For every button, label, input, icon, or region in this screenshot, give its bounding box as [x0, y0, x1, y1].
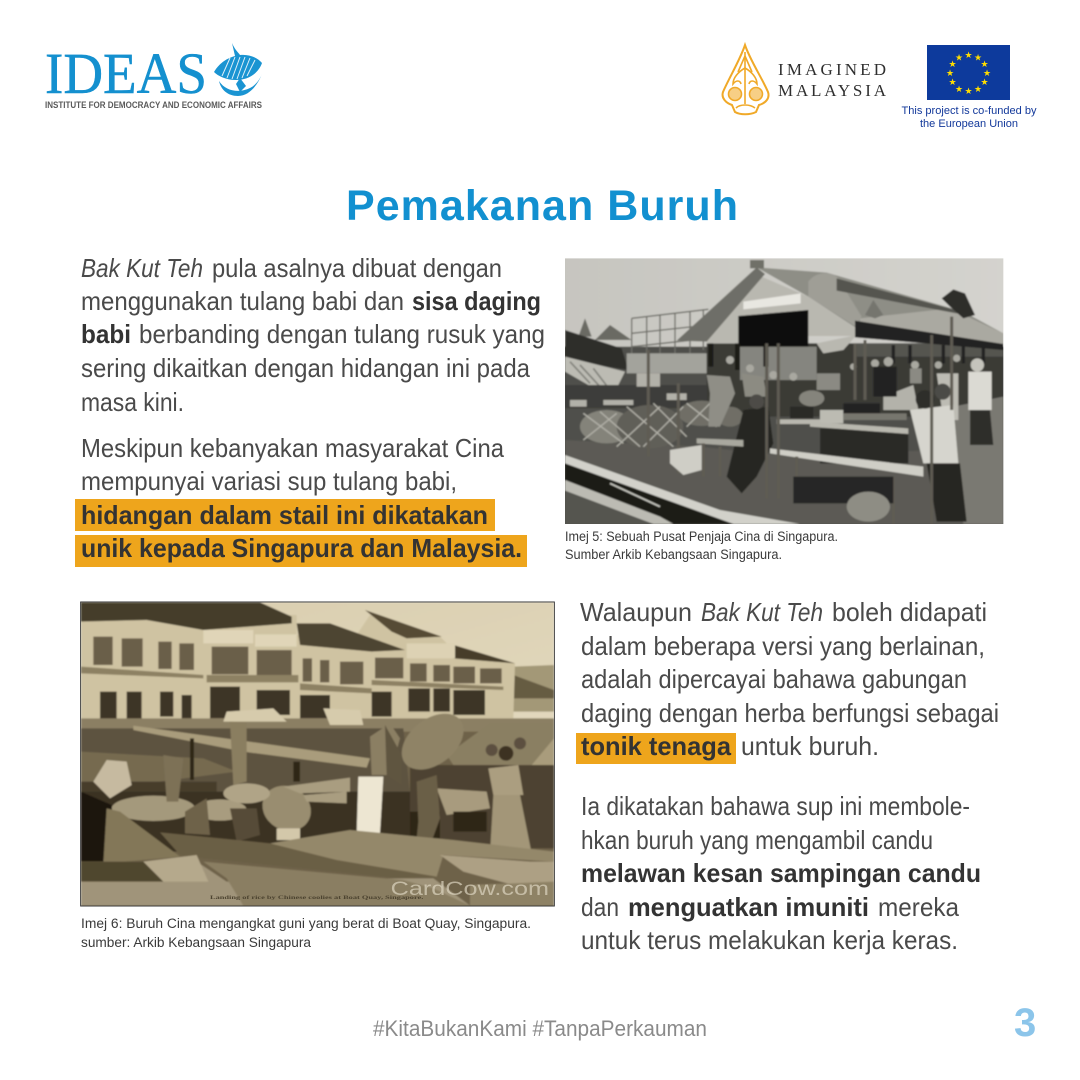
- boats mid: [81, 728, 410, 795]
- sacks: [112, 796, 195, 821]
- text block: first paragraph: menggunakan tulang babi dan: [81, 286, 404, 316]
- text block: third paragraph with highlight: Walaupun: [580, 597, 692, 627]
- text block: third paragraph with highlight: boleh didapati: [832, 597, 987, 627]
- text block: third paragraph with highlight: [576, 597, 999, 764]
- IDEAS wordmark: IDEAS: [45, 41, 207, 106]
- text block: third paragraph with highlight: untuk buruh.: [741, 731, 879, 761]
- shophouses wall: [81, 615, 515, 718]
- text block: second paragraph with highlight: Meskipun kebanyakan masyarakat Cina: [81, 433, 504, 463]
- text block: third paragraph with highlight: daging dengan herba berfungsi sebagai: [581, 698, 999, 728]
- distant buildings: [513, 665, 554, 712]
- icon: EU flag: ★: [980, 77, 989, 87]
- right canopy: [448, 732, 554, 766]
- text block: first paragraph: [81, 253, 545, 417]
- ground: [565, 440, 1003, 524]
- text block: first paragraph: masa kini.: [81, 387, 184, 417]
- people: [707, 375, 735, 427]
- IDEAS tagline: INSTITUTE FOR DEMOCRACY AND ECONOMIC AFFAIRS: [45, 100, 262, 110]
- quay band: [81, 718, 554, 732]
- footer hashtags: #KitaBukanKami #TanpaPerkauman: [373, 1016, 707, 1041]
- channel: [565, 455, 800, 524]
- icon: EU flag: ★: [946, 68, 954, 78]
- text block: third paragraph with highlight: dalam beberapa versi yang berlainan,: [581, 631, 985, 661]
- text block: first paragraph: pula asalnya dibuat dengan: [212, 253, 502, 283]
- baskets: [579, 409, 624, 444]
- icon: EU flag: ★: [955, 52, 963, 62]
- Imagined Malaysia wordmark: IMAGINED: [778, 60, 886, 79]
- text block: fourth paragraph: mereka: [878, 892, 959, 922]
- icon: EU flag: ★: [948, 59, 957, 69]
- highlight line 2: unik kepada Singapura dan Malaysia.: [81, 533, 522, 563]
- co-funding note: This project is co-funded by: [902, 105, 1037, 117]
- icon: EU flag: ★: [974, 84, 982, 94]
- caption: image 5: [565, 529, 838, 562]
- workers: [370, 723, 400, 775]
- logo: Imagined Malaysia: MALAYSIA: [778, 81, 887, 100]
- text block: fourth paragraph: Ia dikatakan bahawa sup ini membole-: [581, 791, 970, 821]
- icon: IDEAS bird: [214, 43, 262, 96]
- text block: fourth paragraph: melawan kesan sampingan candu: [581, 858, 981, 888]
- icon: EU flag: ★: [980, 59, 989, 69]
- watermark: CardCow.com: [391, 879, 549, 900]
- tables and benches: [820, 428, 908, 463]
- text block: first paragraph: babi: [81, 319, 131, 349]
- photo: Chinese hawker centre: [565, 258, 1004, 524]
- co-funding note: the European Union: [920, 118, 1018, 130]
- logo: Imagined Malaysia: [723, 45, 887, 114]
- logo: EU flag and co-funding note: [902, 45, 1037, 130]
- text block: first paragraph: sering dikaitkan dengan hidangan ini pada: [81, 353, 530, 383]
- photo: Boat Quay coolies: [80, 602, 555, 906]
- title: Pemakanan Buruh: [346, 182, 738, 230]
- caption: image 6: [81, 916, 531, 950]
- caption: image 5: Sumber Arkib Kebangsaan Singapura.: [565, 547, 782, 562]
- icon: wayang gunungan: [723, 45, 769, 114]
- scaffold and trees: [578, 318, 632, 340]
- windows upper: [93, 637, 502, 684]
- lower dark mass: [81, 792, 410, 852]
- postcard caption: Landing of rice by Chinese coolies at Boat Quay, Singapore.: [210, 895, 424, 901]
- awnings: [81, 667, 503, 693]
- icon: EU flag: ★: [964, 86, 973, 96]
- roof right: [758, 267, 1000, 332]
- logo: IDEAS: [45, 41, 262, 110]
- cloth: [565, 357, 625, 392]
- highlight: tonik tenaga: tonik tenaga: [581, 731, 732, 761]
- caption: image 6: sumber: Arkib Kebangsaan Singapura: [81, 935, 311, 950]
- roofs: [81, 602, 292, 630]
- text block: third paragraph with highlight: adalah dipercayai bahawa gabungan: [581, 664, 967, 694]
- text block: fourth paragraph: untuk terus melakukan kerja keras.: [581, 925, 958, 955]
- highlight line 1: hidangan dalam stail ini dikatakan: [81, 500, 488, 530]
- left shack: [565, 330, 628, 370]
- text block: first paragraph: Bak Kut Teh: [81, 253, 203, 283]
- shop fronts: [100, 687, 485, 720]
- text block: first paragraph: berbanding dengan tulang rusuk yang: [139, 319, 545, 349]
- text block: fourth paragraph: [581, 791, 981, 955]
- text block: first paragraph: sisa daging: [412, 286, 541, 316]
- page number: 3: [1014, 1001, 1036, 1045]
- caption: image 6: Imej 6: Buruh Cina mengangkat guni yang berat di Boat Quay, Singapura.: [81, 916, 531, 931]
- icon: EU flag: ★: [955, 84, 963, 94]
- text block: second paragraph with highlight: [75, 433, 527, 567]
- text block: second paragraph with highlight: mempunyai variasi sup tulang babi,: [81, 466, 457, 496]
- left crowd: [565, 385, 708, 408]
- co-funding note: [902, 105, 1037, 130]
- water: [81, 862, 470, 906]
- icon: EU flag: ★: [948, 77, 957, 87]
- icon: EU flag: [927, 45, 1010, 100]
- text block: third paragraph with highlight: Bak Kut Teh: [701, 597, 823, 627]
- icon: EU flag: ★: [983, 68, 991, 78]
- caption: image 5: Imej 5: Sebuah Pusat Penjaja Cina di Singapura.: [565, 529, 838, 544]
- text block: fourth paragraph: menguatkan imuniti: [628, 892, 869, 922]
- hull: [81, 792, 113, 862]
- deck: [270, 830, 554, 877]
- under eaves: [707, 343, 1003, 417]
- gable wall: [707, 276, 857, 343]
- text block: fourth paragraph: dan: [581, 892, 619, 922]
- text block: fourth paragraph: hkan buruh yang mengambil candu: [581, 825, 933, 855]
- icon: EU flag: ★: [964, 50, 973, 60]
- icon: EU flag: ★: [974, 52, 982, 62]
